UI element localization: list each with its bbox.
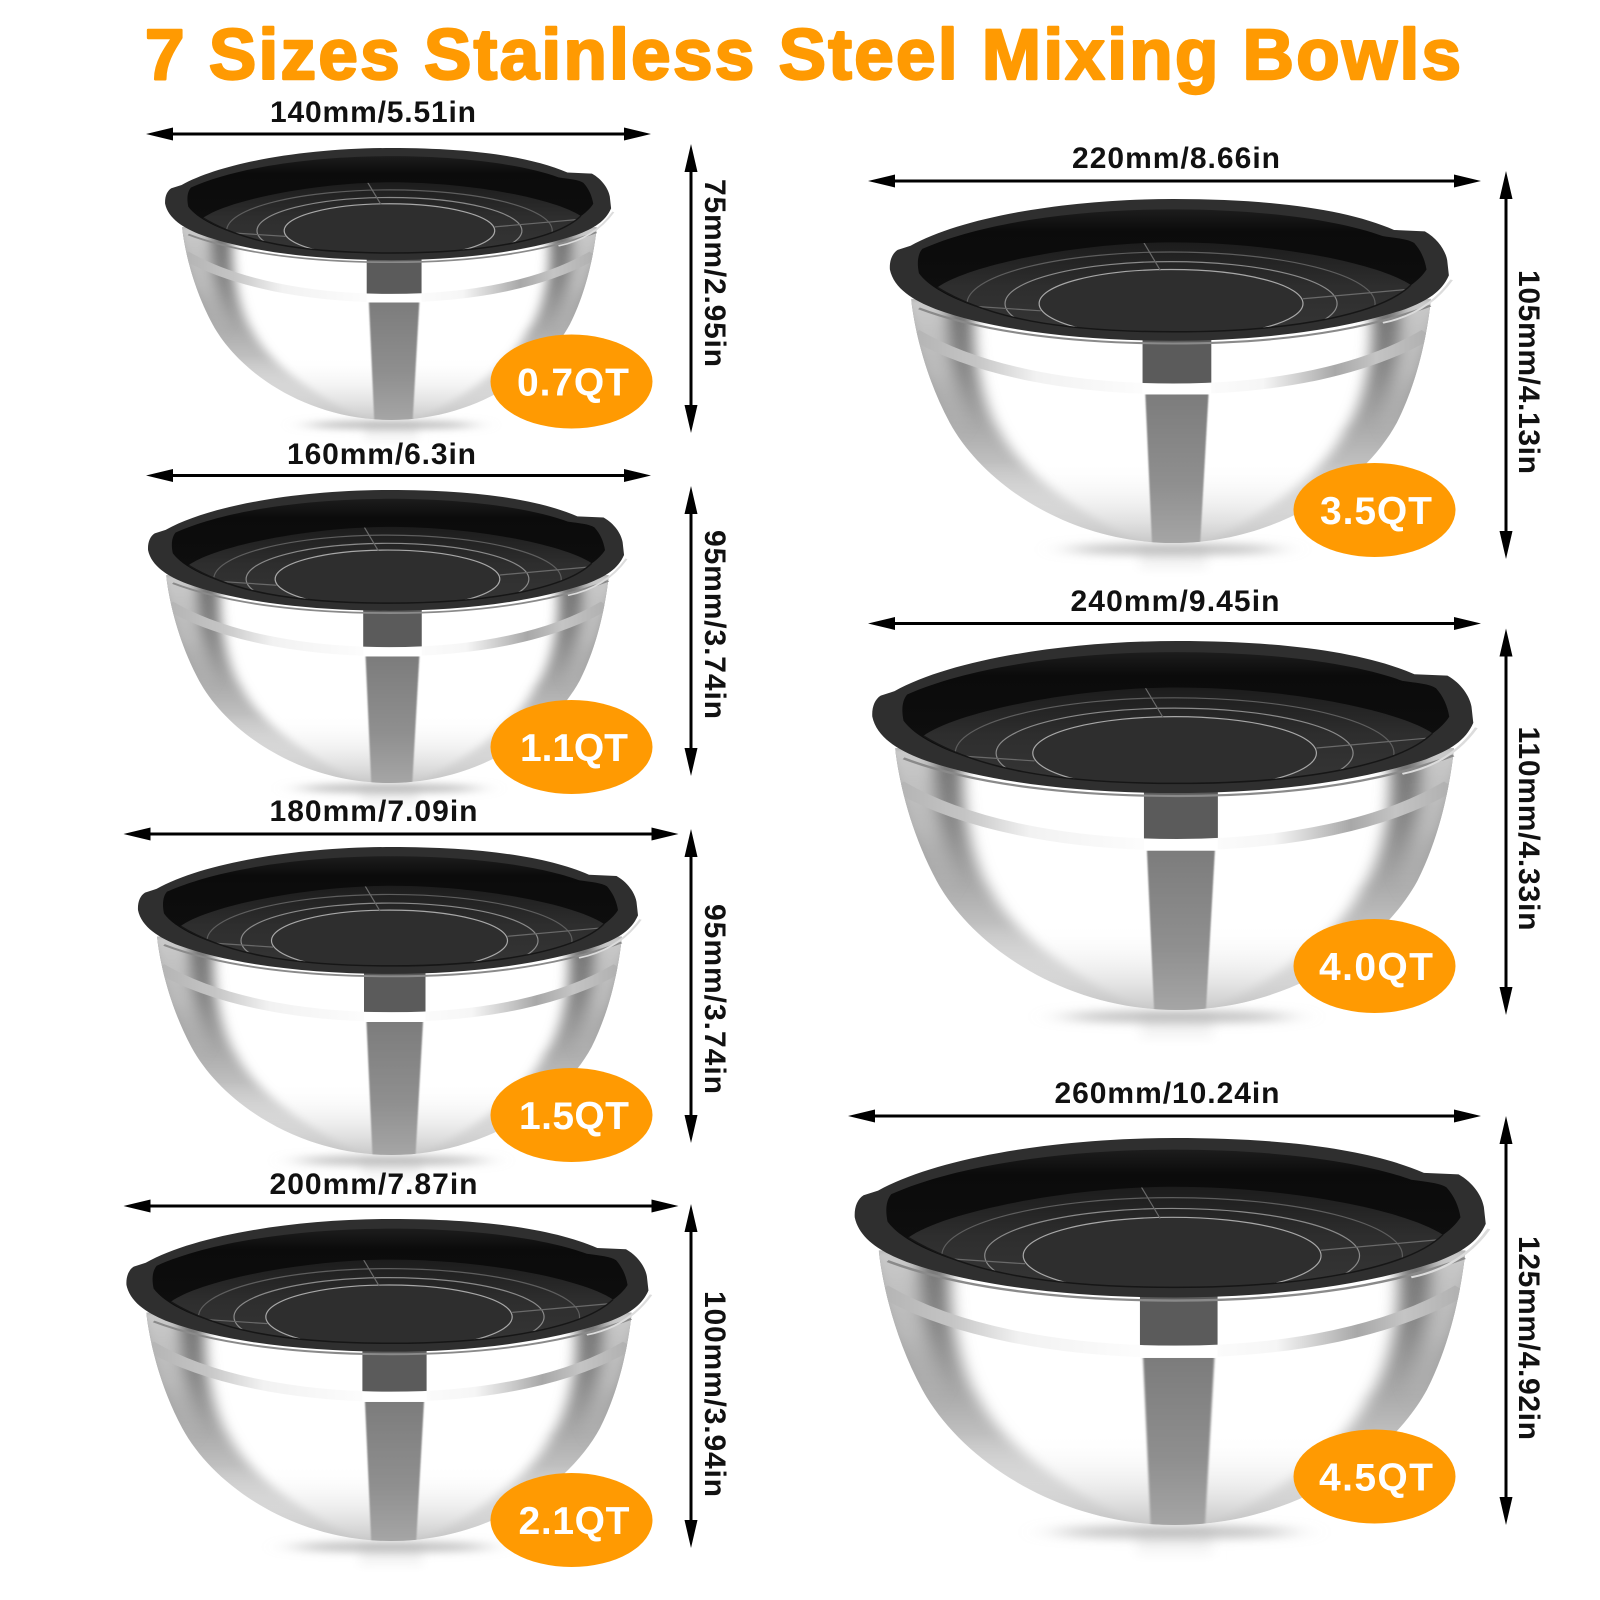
capacity badge — [1294, 919, 1456, 1013]
capacity badge: 1.1QT — [520, 727, 628, 770]
capacity badge — [490, 700, 652, 794]
width arrow — [868, 174, 1481, 188]
capacity badge: 4.0QT — [1319, 946, 1433, 989]
width arrow — [868, 617, 1481, 630]
width label: 220mm/8.66in — [1072, 142, 1280, 175]
width label: 180mm/7.09in — [270, 795, 478, 828]
title: 7 Sizes Stainless Steel Mixing Bowls — [145, 16, 1461, 95]
dimension group: 1.5QT bowl — [124, 795, 731, 1162]
width arrow — [146, 469, 651, 482]
height arrow — [1500, 628, 1512, 1015]
capacity badge: 4.5QT — [1319, 1456, 1433, 1500]
height arrow — [1500, 171, 1512, 559]
dimension group: 4.0QT bowl — [868, 585, 1545, 1015]
width arrow — [146, 128, 651, 140]
capacity badge: 2.1QT — [518, 1500, 630, 1543]
bowl image: 1.1QT — [148, 490, 626, 811]
capacity badge — [1294, 1430, 1456, 1524]
width arrow — [848, 1110, 1481, 1122]
bowl image: 0.7QT — [165, 148, 613, 446]
dimension group: 0.7QT bowl — [146, 96, 731, 433]
dimension group: 4.5QT bowl — [848, 1077, 1545, 1525]
height label: 95mm/3.74in — [698, 904, 731, 1094]
capacity badge: 0.7QT — [517, 362, 629, 404]
height arrow — [684, 486, 698, 776]
bowl image: 3.5QT — [890, 199, 1452, 576]
bowl image: 4.5QT — [855, 1138, 1489, 1562]
height arrow — [684, 1204, 698, 1548]
capacity badge: 1.5QT — [519, 1095, 629, 1138]
height arrow — [684, 829, 698, 1143]
bowl image: 2.1QT — [126, 1219, 651, 1572]
height arrow — [684, 144, 698, 433]
height arrow — [1500, 1116, 1512, 1525]
height label: 105mm/4.13in — [1512, 270, 1545, 474]
dimension group: 3.5QT bowl — [868, 142, 1545, 559]
height label: 75mm/2.95in — [698, 179, 731, 367]
capacity badge — [490, 1473, 652, 1567]
height label: 110mm/4.33in — [1512, 726, 1545, 930]
width label: 160mm/6.3in — [287, 438, 476, 471]
width arrow — [124, 1200, 678, 1212]
bowl image: 4.0QT — [872, 641, 1476, 1045]
width arrow — [124, 828, 678, 840]
dimension group: 2.1QT bowl — [124, 1168, 731, 1567]
capacity badge — [490, 334, 652, 428]
width label: 240mm/9.45in — [1070, 585, 1280, 618]
capacity badge — [1294, 463, 1456, 557]
width label: 200mm/7.87in — [270, 1168, 478, 1201]
height label: 100mm/3.94in — [698, 1291, 731, 1497]
height label: 95mm/3.74in — [698, 530, 731, 719]
capacity badge: 3.5QT — [1320, 490, 1432, 533]
capacity badge — [490, 1068, 652, 1162]
width label: 260mm/10.24in — [1054, 1077, 1280, 1110]
width label: 140mm/5.51in — [270, 96, 476, 129]
bowl image: 1.5QT — [138, 847, 641, 1184]
height label: 125mm/4.92in — [1512, 1236, 1545, 1440]
dimension group: 1.1QT bowl — [146, 438, 731, 794]
